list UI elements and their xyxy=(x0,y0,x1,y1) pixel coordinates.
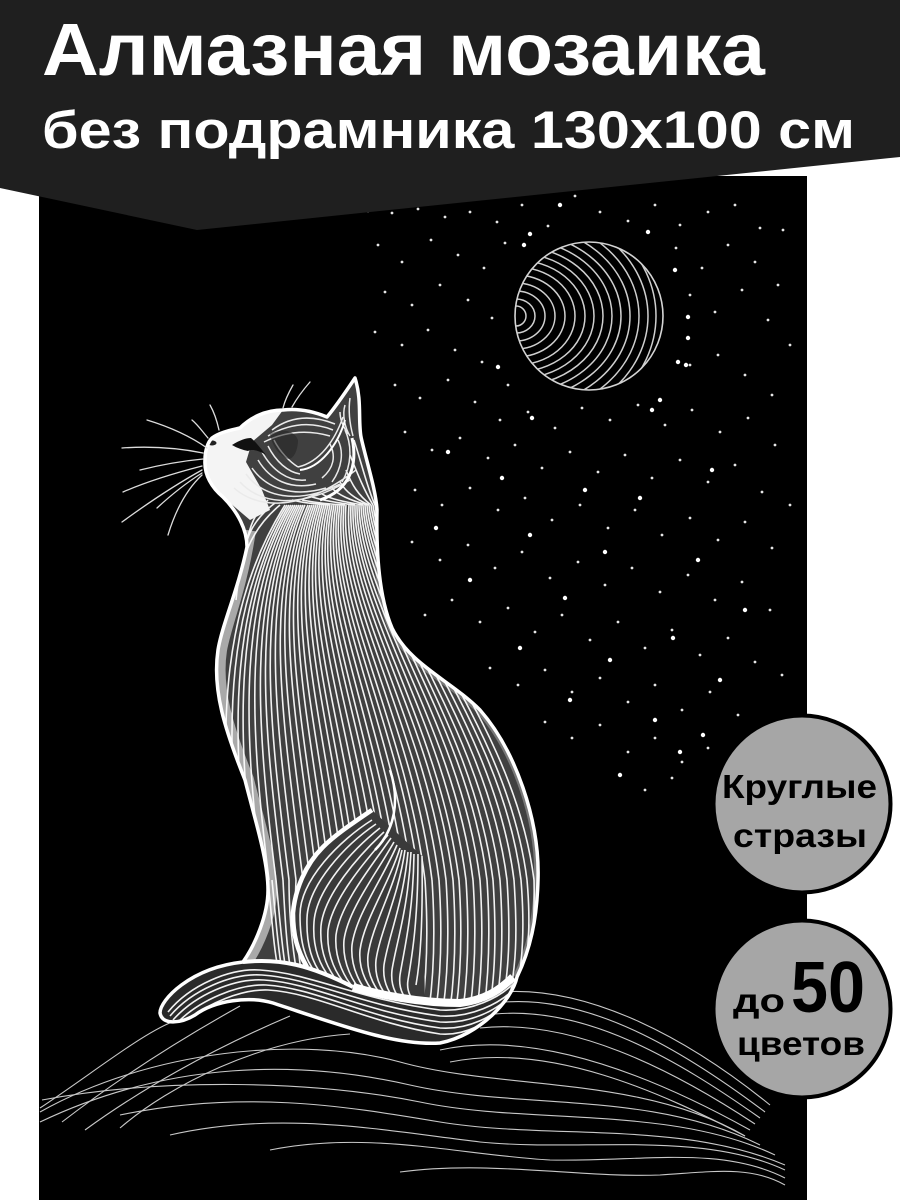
badge: round rhinestones: стразы xyxy=(733,817,867,854)
cat xyxy=(122,378,538,1043)
moon xyxy=(514,241,664,391)
badge: up to 50 colours: 50 xyxy=(791,948,865,1028)
badge: up to 50 colours: цветов xyxy=(737,1025,865,1062)
starry sky xyxy=(368,196,790,790)
badge: up to 50 colours: до xyxy=(733,982,785,1019)
cat forehead shadow xyxy=(270,431,298,459)
title: Алмазная мозаика xyxy=(42,8,766,91)
cat outline xyxy=(160,378,538,1043)
hill wave lines xyxy=(40,991,785,1185)
badge: round rhinestones xyxy=(714,716,890,892)
cat haunch xyxy=(293,770,425,1006)
background artwork panel xyxy=(39,176,807,1200)
badge: up to 50 colours xyxy=(714,920,890,1098)
subtitle: без подрамника 130х100 см xyxy=(42,101,855,160)
cat chest highlight xyxy=(217,510,538,977)
header banner xyxy=(0,0,900,230)
cat eye xyxy=(232,438,266,455)
cat whiskers xyxy=(122,382,310,535)
cat fur lines xyxy=(226,440,534,1010)
cat tail xyxy=(160,961,515,1043)
cat body fill xyxy=(160,378,538,1043)
cat nose xyxy=(208,440,216,446)
cat head fill and face xyxy=(205,398,356,520)
badge: round rhinestones: Круглые xyxy=(722,768,877,805)
